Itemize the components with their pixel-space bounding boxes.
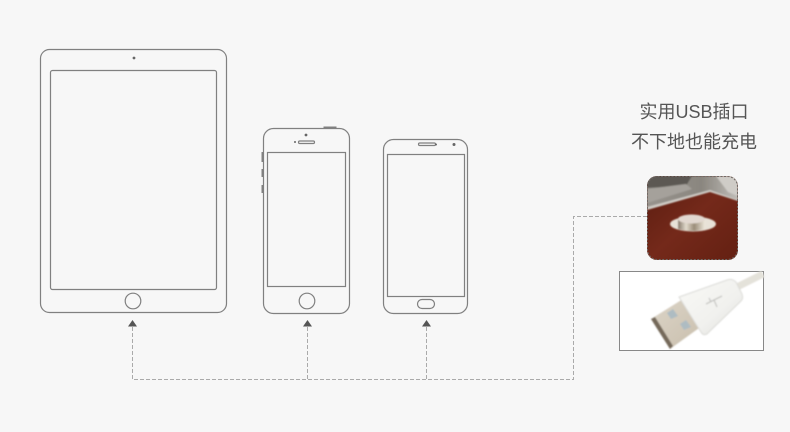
arrow: to iPhone	[303, 320, 312, 326]
device: iPhone outline	[262, 126, 350, 314]
heading: USB port caption: 实用USB插口	[639, 102, 749, 122]
arrow: to tablet	[128, 320, 137, 326]
photo: USB cable plug	[620, 272, 764, 350]
heading: USB port caption: 不下地也能充电	[631, 132, 757, 152]
photo: USB port in desk	[647, 176, 738, 260]
device: Android phone outline	[384, 140, 468, 314]
heading: USB port caption	[631, 102, 757, 152]
photo border: dashed	[648, 176, 738, 260]
arrow: to Android phone	[422, 320, 431, 326]
connector: dashed lines from USB port to devices	[132, 216, 647, 380]
device: tablet outline	[40, 50, 226, 312]
